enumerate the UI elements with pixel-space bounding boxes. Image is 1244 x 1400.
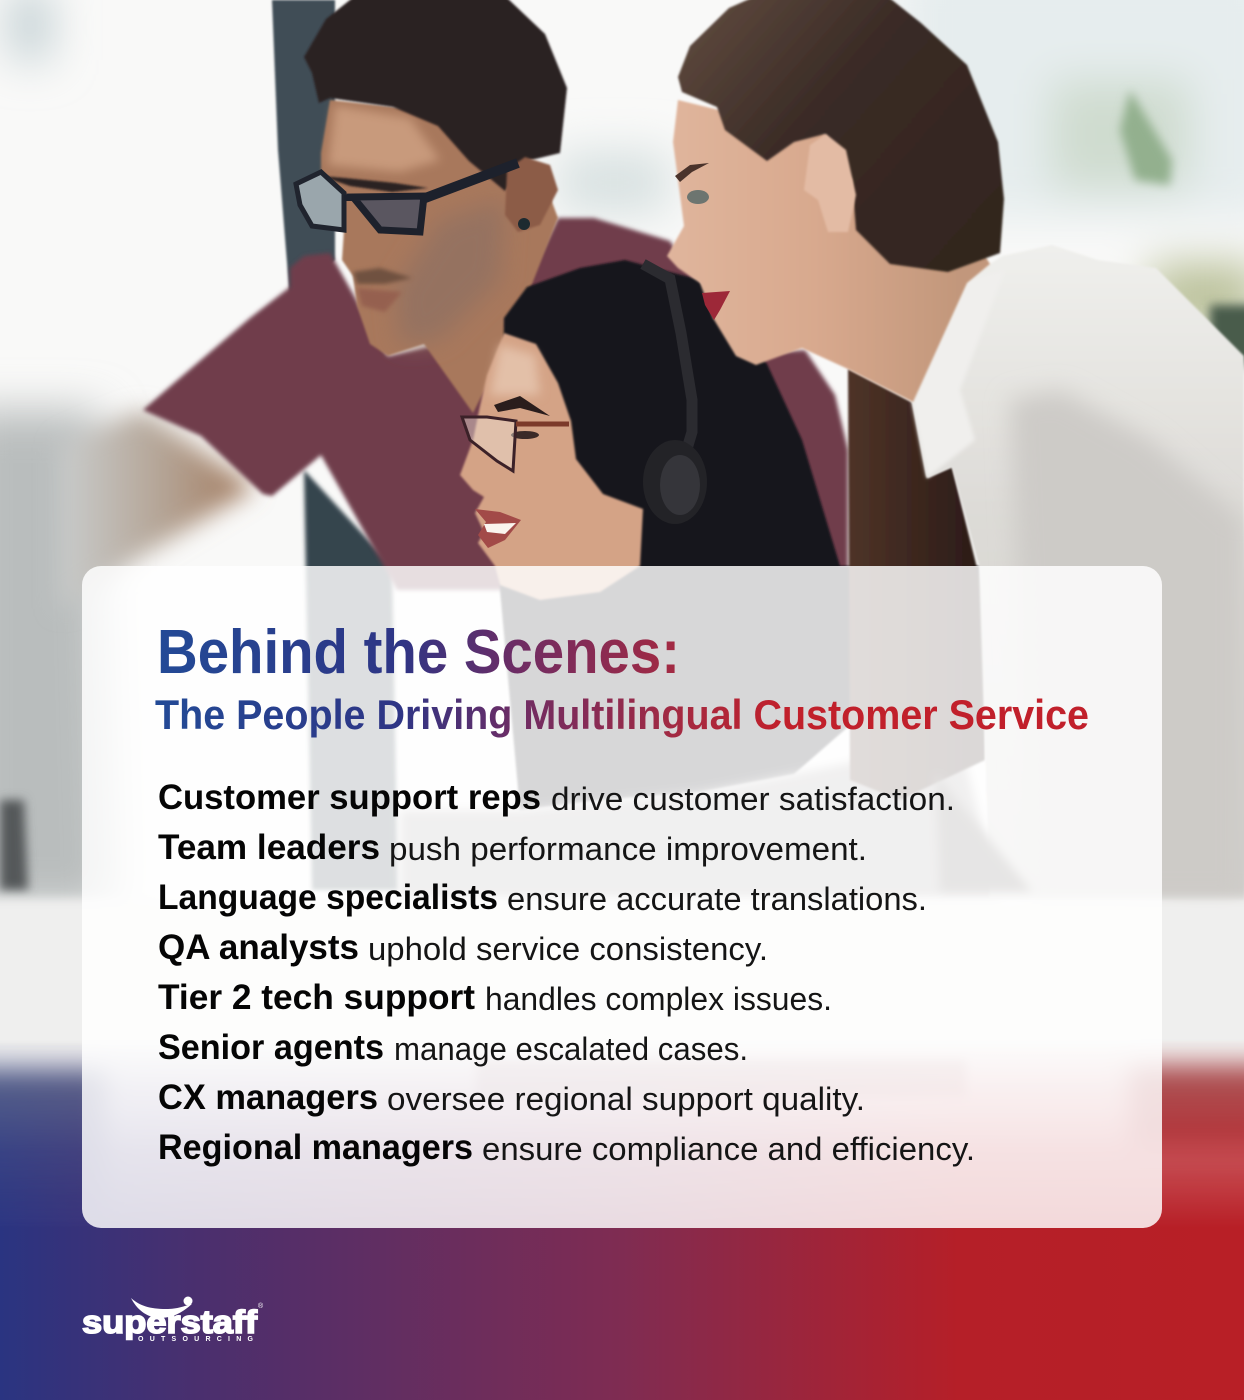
centre woman: mouth — [475, 509, 521, 548]
right woman: white blouse — [912, 245, 1244, 900]
role: senior agents: manage escalated cases. — [394, 1031, 748, 1067]
role: regional managers: Regional managers — [158, 1128, 473, 1167]
desk — [0, 899, 1244, 1099]
role: regional managers: ensure compliance and efficiency. — [482, 1131, 975, 1167]
role: CX managers: oversee regional support quality. — [387, 1081, 865, 1117]
centre woman: forehead highlight — [490, 345, 540, 395]
woman on the right — [667, 0, 1244, 900]
role: team leaders: push performance improvement. — [389, 831, 867, 867]
blurred plant — [0, 90, 1244, 890]
role: CX managers — [158, 1078, 865, 1117]
man: stubble shading — [395, 200, 505, 345]
role: customer support reps — [158, 778, 955, 817]
right woman: eyebrow — [675, 163, 709, 182]
man: neck and face — [321, 100, 558, 413]
role: tier 2 tech support: Tier 2 tech support — [158, 978, 475, 1017]
right woman: collar — [912, 270, 1005, 478]
heading: Behind the Scenes: Behind the Scenes: — [157, 618, 680, 687]
role: language specialists: Language specialists — [158, 878, 498, 917]
right woman: lower hair — [848, 369, 985, 800]
lower dim shapes — [476, 1060, 966, 1096]
role: CX managers: CX managers — [158, 1078, 378, 1117]
man: mouth — [357, 288, 402, 312]
man: forehead highlight — [328, 105, 440, 172]
role: tier 2 tech support: handles complex issues. — [485, 981, 832, 1017]
role: language specialists: ensure accurate translations. — [507, 881, 927, 917]
right woman: elbow shadow in panel — [936, 774, 1032, 892]
centre woman: glasses — [462, 417, 569, 471]
role: tier 2 tech support — [158, 978, 832, 1017]
logo: superstaff outsourcing — [82, 1296, 264, 1343]
role: language specialists — [158, 878, 927, 917]
man: maroon shirt — [143, 218, 848, 590]
logo registered mark: ® — [258, 1302, 264, 1310]
translucent text panel — [82, 566, 1162, 1228]
role: customer support reps: Customer support reps — [158, 778, 541, 817]
left and right desk objects — [0, 1068, 1244, 1222]
man: earring — [518, 218, 530, 230]
list of roles — [158, 778, 975, 1167]
role: customer support reps: drive customer satisfaction. — [551, 781, 955, 817]
man: glasses — [296, 163, 518, 232]
role: QA analysts — [158, 928, 768, 967]
role: QA analysts: QA analysts — [158, 928, 359, 967]
right woman: hair — [678, 0, 1004, 272]
role: senior agents — [158, 1028, 748, 1067]
logo swoosh — [131, 1298, 192, 1318]
role: senior agents: Senior agents — [158, 1028, 384, 1067]
blurred office background — [0, 0, 1244, 910]
role: team leaders: Team leaders — [158, 828, 380, 867]
role: team leaders — [158, 828, 867, 867]
centre woman: eye — [511, 431, 539, 439]
man — [60, 0, 848, 610]
logo wordmark: superstaff — [82, 1304, 257, 1340]
dark window column — [272, 0, 398, 890]
centre woman: hair — [500, 260, 985, 810]
bottom gradient band — [0, 1040, 1244, 1400]
subheading: The People Driving Multilingual Customer Service — [155, 691, 1089, 738]
headset — [643, 264, 707, 524]
logo tagline: OUTSOURCING — [138, 1336, 254, 1343]
man: hair — [304, 0, 567, 191]
man: blurred arm — [60, 410, 255, 610]
right woman: eye — [687, 190, 709, 204]
centre woman: eyebrow — [494, 396, 550, 416]
role: QA analysts: uphold service consistency. — [368, 931, 768, 967]
right woman: lips — [702, 291, 730, 320]
man: ear — [505, 157, 558, 232]
logo dot — [184, 1296, 192, 1306]
role: regional managers — [158, 1128, 975, 1167]
woman in the centre with headset — [400, 260, 1000, 900]
right woman: face and neck — [667, 100, 990, 402]
man: moustache — [353, 268, 412, 284]
right woman: ear — [804, 134, 856, 232]
centre woman: face and neck — [460, 333, 643, 600]
centre woman: body below hair — [400, 740, 1000, 900]
right woman: shaded sleeve — [1010, 390, 1244, 900]
man: eyebrow — [321, 176, 428, 192]
title — [155, 618, 1089, 738]
